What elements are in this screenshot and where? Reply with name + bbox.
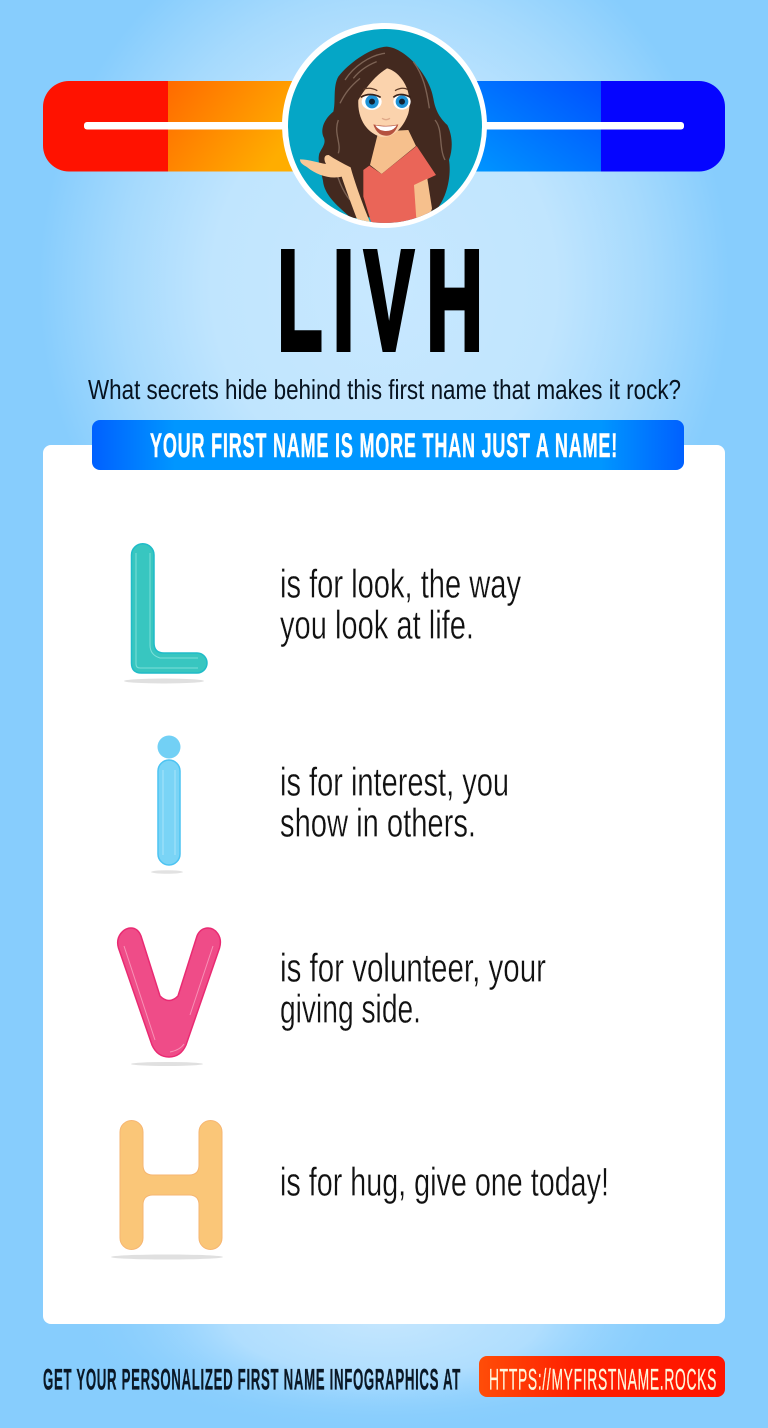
icon: letter L	[124, 544, 207, 684]
text: L meaning: is for look, the way	[280, 562, 521, 606]
letter V row	[118, 928, 546, 1066]
hair	[319, 47, 452, 218]
text: H meaning: is for hug, give one today!	[280, 1160, 609, 1204]
text: I meaning: show in others.	[280, 802, 476, 846]
left arm and hand	[300, 155, 371, 223]
name title: H	[427, 221, 483, 379]
text: V meaning: is for volunteer, your	[280, 946, 546, 990]
icon: letter V	[118, 928, 220, 1066]
letter H row	[111, 1120, 609, 1260]
gradient bar	[43, 81, 725, 172]
letter L row	[124, 544, 521, 684]
name title: I	[333, 221, 354, 379]
letter I row	[151, 736, 509, 874]
eyes	[362, 93, 382, 110]
mouth	[373, 124, 398, 136]
face	[358, 68, 410, 137]
avatar portrait	[282, 23, 487, 228]
name title: L	[278, 221, 322, 379]
banner	[92, 420, 684, 470]
name title	[278, 221, 483, 379]
footer url button	[479, 1356, 725, 1397]
white content panel	[43, 445, 725, 1324]
text: V meaning: giving side.	[280, 988, 421, 1032]
neck	[370, 130, 416, 174]
shirt	[363, 146, 436, 224]
text: I meaning: is for interest, you	[280, 760, 509, 804]
text: L meaning: you look at life.	[280, 604, 474, 648]
icon: letter H	[111, 1120, 223, 1260]
right arm	[414, 178, 432, 218]
name title: V	[364, 221, 414, 379]
icon: letter i	[151, 736, 183, 874]
